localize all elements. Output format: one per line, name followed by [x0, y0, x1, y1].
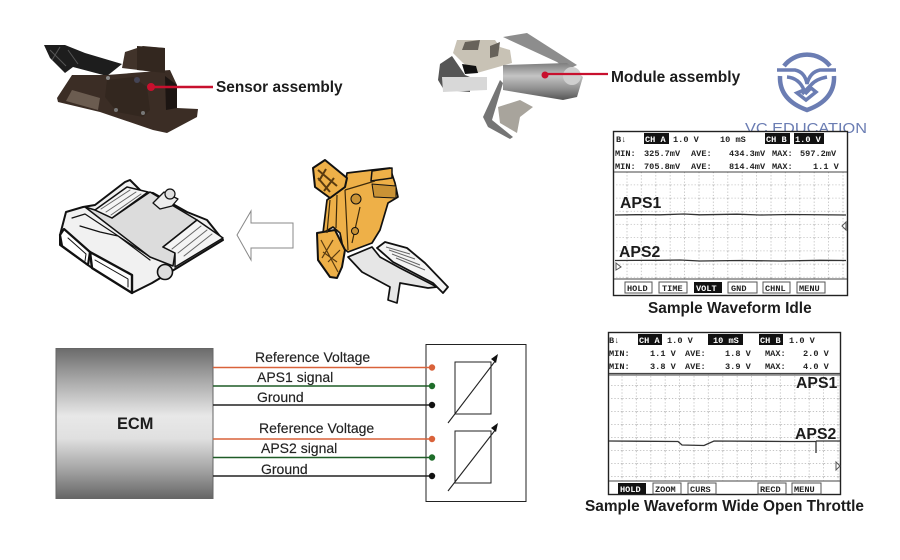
trace APS2 [609, 441, 840, 453]
scope header text: MIN: [615, 149, 636, 159]
scope soft buttons: VOLT [696, 284, 717, 294]
wire: APS1 signal: APS1 signal [257, 369, 333, 385]
logo wordmark: VC EDUCATION [745, 120, 867, 137]
wire: reference voltage 1: Reference Voltage [255, 349, 370, 365]
scope header text: AVE: [691, 149, 712, 159]
arrow: sensor to ECU [237, 211, 293, 260]
pedal photo: sensor assembly [44, 45, 198, 133]
wire: ground 2 [213, 461, 435, 479]
scope header text: 10 mS [720, 135, 746, 145]
scope header text: CH A [639, 336, 660, 346]
resistor 1 [448, 354, 498, 423]
trace APS1 [609, 374, 840, 376]
module assembly pointer [542, 72, 608, 78]
wire: ground 1 [213, 389, 435, 408]
scope header text: CH A [645, 135, 666, 145]
scope header text: 3.9 V [725, 362, 752, 372]
scope header text: 2.0 V [803, 349, 830, 359]
scope header text: B↓ [616, 135, 626, 145]
label: sensor assembly: Sensor assembly [216, 79, 343, 96]
scope header text: 1.0 V [667, 336, 694, 346]
scope header text: AVE: [691, 162, 712, 172]
scope header text: MIN: [609, 349, 630, 359]
scope soft buttons: MENU [794, 485, 815, 495]
ECM block [56, 348, 213, 498]
scope soft buttons: TIME [662, 284, 683, 294]
caption: wide open throttle: Sample Waveform Wide Open Throttle [585, 498, 864, 515]
scope header text: 705.8mV [644, 162, 681, 172]
scope header text: 1.0 V [789, 336, 816, 346]
caption: idle: Sample Waveform Idle [648, 300, 812, 317]
wire: APS1 signal [213, 369, 435, 389]
scope header text: MAX: [772, 149, 793, 159]
scope header text: MAX: [765, 362, 786, 372]
scope header text [615, 133, 840, 172]
scope header text: CH B [766, 135, 787, 145]
wire: ground 1: Ground [257, 389, 304, 405]
resistor 2 [448, 423, 498, 491]
wire: ground 2: Ground [261, 461, 308, 477]
pedal sensor cutaway illustration [313, 160, 448, 303]
scope soft buttons: MENU [799, 284, 820, 294]
scope soft buttons: CHNL [765, 284, 786, 294]
scope soft buttons: ZOOM [655, 485, 676, 495]
wire: APS2 signal: APS2 signal [261, 440, 337, 456]
scope header text: 3.8 V [650, 362, 677, 372]
ECU illustration [60, 180, 223, 293]
scope header text: MIN: [609, 362, 630, 372]
scope header text: 1.1 V [813, 162, 840, 172]
scope header text: MIN: [615, 162, 636, 172]
scope header text: 1.0 V [795, 135, 822, 145]
logo: VC Education [745, 55, 867, 137]
scope soft buttons [618, 483, 821, 495]
scope header text [609, 334, 830, 372]
scope: wide open throttle waveform [608, 332, 840, 495]
scope header text: AVE: [685, 349, 706, 359]
label APS2: APS2 [795, 426, 836, 443]
wire: reference voltage 1 [213, 349, 435, 371]
scope soft buttons: HOLD [627, 284, 648, 294]
trace APS1 [615, 214, 846, 215]
scope soft buttons: CURS [690, 485, 711, 495]
scope header text: 814.4mV [729, 162, 766, 172]
scope: idle waveform [614, 132, 848, 296]
scope header text: 4.0 V [803, 362, 830, 372]
wire: reference voltage 2: Reference Voltage [259, 420, 374, 436]
scope header text: 434.3mV [729, 149, 766, 159]
scope soft buttons [625, 282, 825, 294]
wire: APS2 signal [213, 440, 435, 461]
scope header text: 325.7mV [644, 149, 681, 159]
label APS1: APS1 [796, 375, 837, 392]
scope soft buttons: RECD [760, 485, 781, 495]
scope header text: 10 mS [713, 336, 739, 346]
wire: reference voltage 2 [213, 420, 435, 442]
scope header text: 597.2mV [800, 149, 837, 159]
wiring harness [213, 349, 435, 479]
scope header text: B↓ [609, 336, 619, 346]
label APS2: APS2 [619, 244, 660, 261]
scope header text: CH B [760, 336, 781, 346]
module photo: module assembly [438, 33, 583, 139]
scope soft buttons: GND [731, 284, 746, 294]
scope soft buttons: HOLD [620, 485, 641, 495]
scope header text: 1.1 V [650, 349, 677, 359]
label: module assembly: Module assembly [611, 69, 741, 86]
scope header text: 1.8 V [725, 349, 752, 359]
scope header text: MAX: [772, 162, 793, 172]
trace APS2 [615, 260, 846, 261]
scope header text: 1.0 V [673, 135, 700, 145]
label APS1: APS1 [620, 195, 661, 212]
scope header text: AVE: [685, 362, 706, 372]
scope header text: MAX: [765, 349, 786, 359]
ECM block: ECM [117, 415, 153, 433]
sensor box with variable resistors [426, 344, 526, 502]
sensor assembly pointer [147, 83, 213, 91]
